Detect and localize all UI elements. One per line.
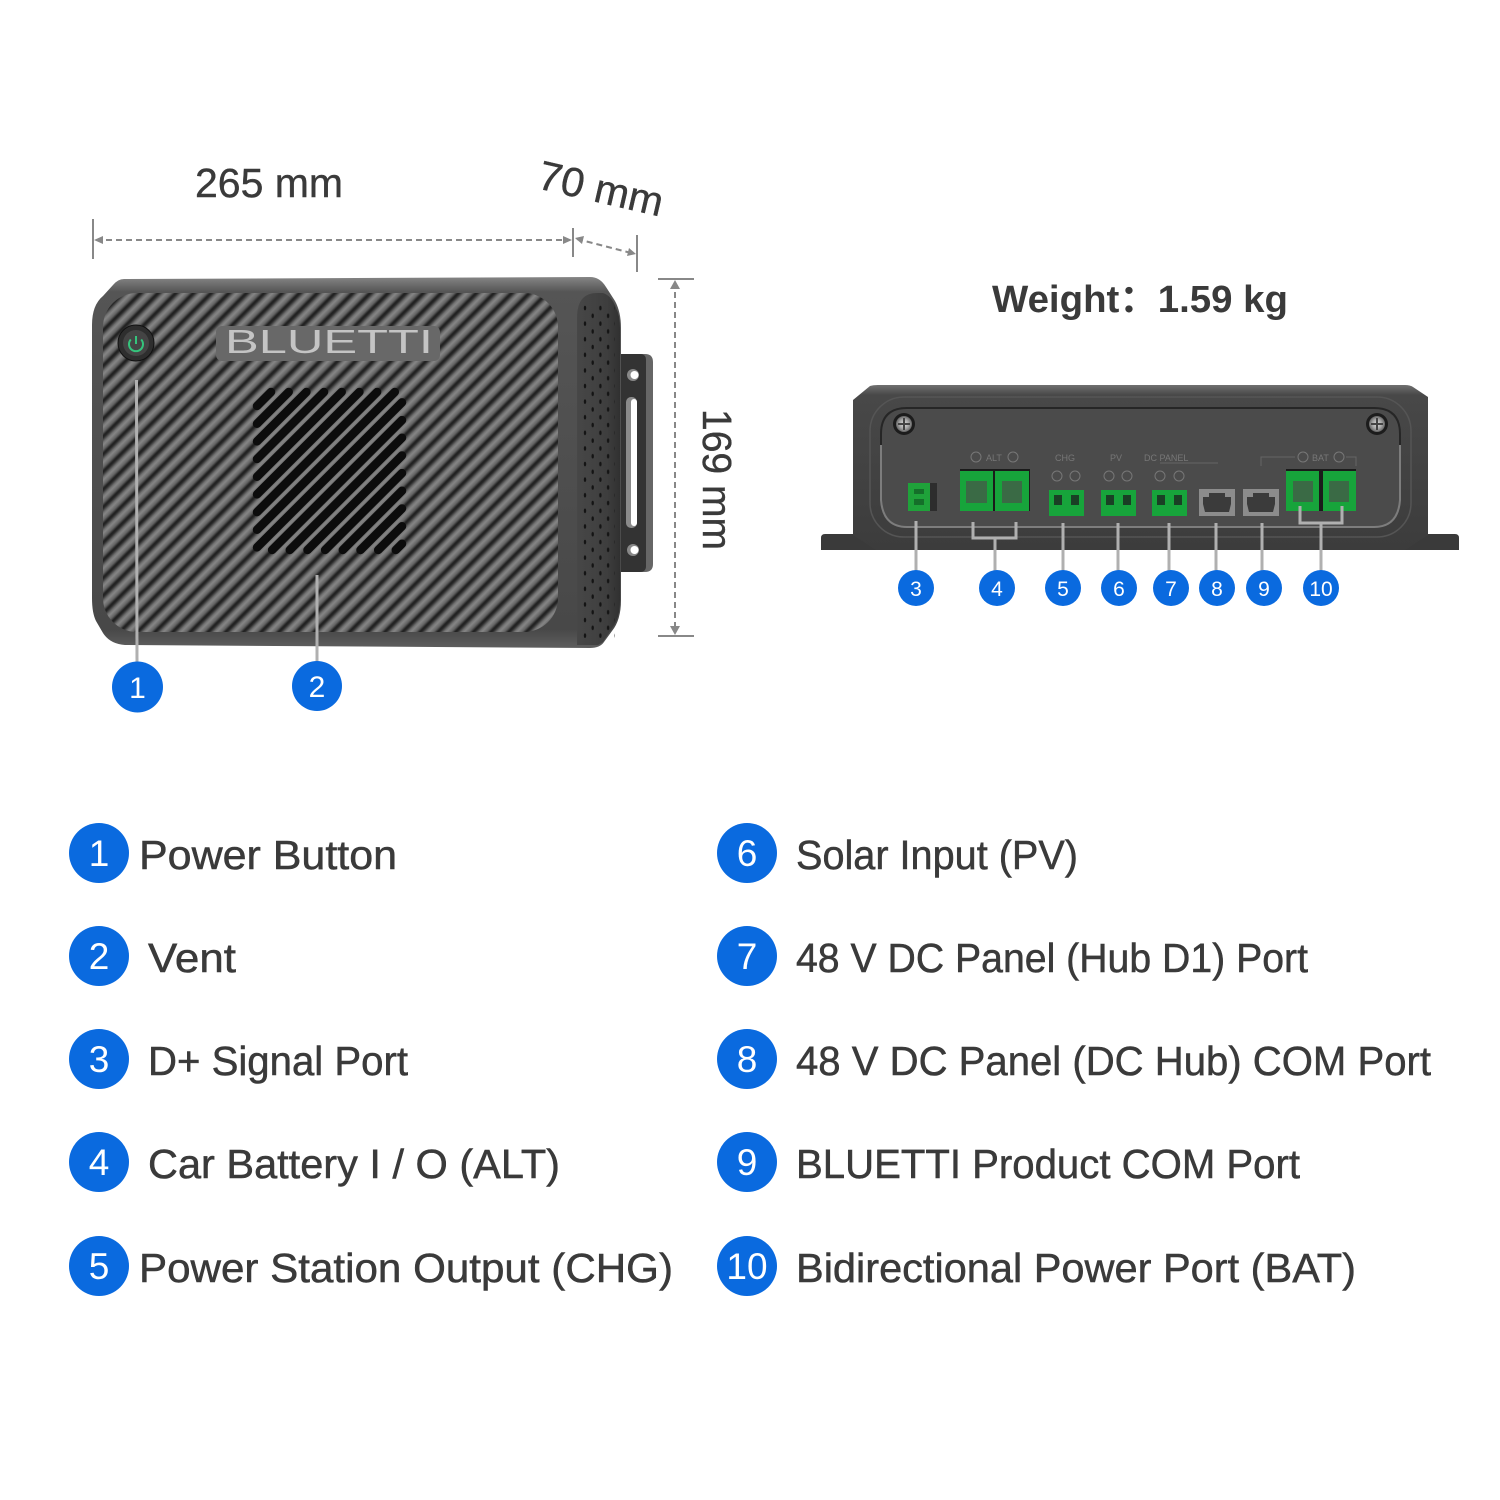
legend item 7: 7 bbox=[737, 936, 757, 977]
dimension: width 265 mm: 265 mm bbox=[195, 160, 343, 206]
port 7: DC panel bbox=[1144, 453, 1218, 516]
dimension: height 169 mm: 169 mm bbox=[694, 409, 740, 550]
ribbed stripes panel bbox=[103, 293, 558, 632]
device: port side view bbox=[821, 385, 1459, 572]
port 5: CHG: CHG bbox=[1055, 453, 1075, 463]
badge 9: 9 bbox=[1258, 578, 1270, 601]
port 9: COM bbox=[1243, 489, 1279, 516]
legend item 1: 1 bbox=[89, 833, 109, 874]
badge 7 bbox=[1153, 570, 1189, 606]
port 4: ALT bbox=[960, 452, 1030, 511]
legend item 4 bbox=[69, 1132, 560, 1192]
legend item 10 bbox=[717, 1236, 1356, 1296]
badge 1 bbox=[112, 662, 163, 712]
port 6: PV bbox=[1101, 453, 1136, 516]
port 10: BAT: BAT bbox=[1312, 453, 1329, 463]
badge 4 bbox=[979, 570, 1015, 606]
legend item 7 bbox=[717, 926, 1309, 986]
dimension: width 265 mm bbox=[93, 160, 573, 259]
legend item 6: 6 bbox=[737, 833, 757, 874]
weight label: Weight：1.59 kg bbox=[992, 279, 1288, 321]
legend item 2: Vent bbox=[148, 935, 237, 981]
badge 8 bbox=[1199, 570, 1235, 606]
legend bbox=[69, 823, 1432, 1296]
BLUETTI logo plate bbox=[216, 323, 440, 361]
legend item 2 bbox=[69, 926, 237, 986]
badge 1: 1 bbox=[129, 672, 146, 705]
legend item 8 bbox=[717, 1029, 1432, 1089]
port badges bbox=[898, 570, 1339, 606]
legend item 5: Power Station Output (CHG) bbox=[139, 1245, 673, 1291]
port 10: BAT bbox=[1261, 452, 1356, 511]
badge 5 bbox=[1045, 570, 1081, 606]
dimension: depth 70 mm: 70 mm bbox=[534, 152, 668, 225]
device: front view bbox=[92, 277, 653, 665]
badge 8: 8 bbox=[1211, 578, 1223, 601]
dimension: height 169 mm bbox=[658, 279, 740, 636]
icon: power button bbox=[118, 325, 154, 361]
side perforated band bbox=[577, 293, 620, 645]
legend item 7: 48 V DC Panel (Hub D1) Port bbox=[796, 935, 1309, 981]
dimension: depth 70 mm bbox=[534, 152, 668, 272]
badge 9 bbox=[1246, 570, 1282, 606]
port 5: CHG bbox=[1049, 453, 1084, 516]
legend item 1: Power Button bbox=[139, 832, 397, 878]
badge 10 bbox=[1303, 570, 1339, 606]
legend item 10: 10 bbox=[726, 1246, 768, 1287]
screw left bbox=[893, 413, 915, 435]
badge 3: 3 bbox=[910, 578, 922, 601]
legend item 8: 8 bbox=[737, 1039, 757, 1080]
badge 5: 5 bbox=[1057, 578, 1069, 601]
legend item 5: 5 bbox=[89, 1246, 109, 1287]
mounting feet bbox=[821, 534, 1459, 550]
mounting bracket bbox=[610, 354, 653, 572]
badge 4: 4 bbox=[991, 578, 1003, 601]
body shell bbox=[92, 277, 621, 648]
badge 7: 7 bbox=[1165, 578, 1177, 601]
legend item 3: 3 bbox=[89, 1039, 109, 1080]
legend item 3: D+ Signal Port bbox=[148, 1038, 409, 1084]
legend item 6 bbox=[717, 823, 1078, 883]
badge 10: 10 bbox=[1309, 578, 1333, 601]
port 7: DC panel: DC PANEL bbox=[1144, 453, 1188, 463]
legend item 8: 48 V DC Panel (DC Hub) COM Port bbox=[796, 1038, 1432, 1084]
inset panel bbox=[870, 397, 1411, 537]
port 6: PV: PV bbox=[1110, 453, 1122, 463]
badge 6: 6 bbox=[1113, 578, 1125, 601]
legend item 3 bbox=[69, 1029, 409, 1089]
port 4: ALT: ALT bbox=[986, 453, 1002, 463]
legend item 1 bbox=[69, 823, 397, 883]
vent bbox=[257, 392, 402, 550]
legend item 9 bbox=[717, 1132, 1301, 1192]
screw right bbox=[1366, 413, 1388, 435]
port 8: COM bbox=[1199, 489, 1235, 516]
leader line 2 bbox=[316, 575, 318, 665]
port 3: D+ signal bbox=[908, 483, 937, 511]
body shell bbox=[853, 385, 1428, 550]
badge 2 bbox=[292, 661, 342, 711]
legend item 6: Solar Input (PV) bbox=[796, 832, 1078, 878]
legend item 5 bbox=[69, 1236, 673, 1296]
legend item 9: 9 bbox=[737, 1142, 757, 1183]
legend item 10: Bidirectional Power Port (BAT) bbox=[796, 1245, 1356, 1291]
leader lines bbox=[916, 506, 1342, 572]
BLUETTI logo plate: BLUETTI bbox=[225, 323, 433, 360]
legend item 9: BLUETTI Product COM Port bbox=[796, 1141, 1301, 1187]
leader line 1 bbox=[135, 380, 138, 665]
badge 6 bbox=[1101, 570, 1137, 606]
badge 2: 2 bbox=[309, 671, 325, 704]
legend item 4: Car Battery I / O (ALT) bbox=[148, 1141, 560, 1187]
legend item 2: 2 bbox=[89, 936, 109, 977]
badge 3 bbox=[898, 570, 934, 606]
legend item 4: 4 bbox=[89, 1142, 109, 1183]
